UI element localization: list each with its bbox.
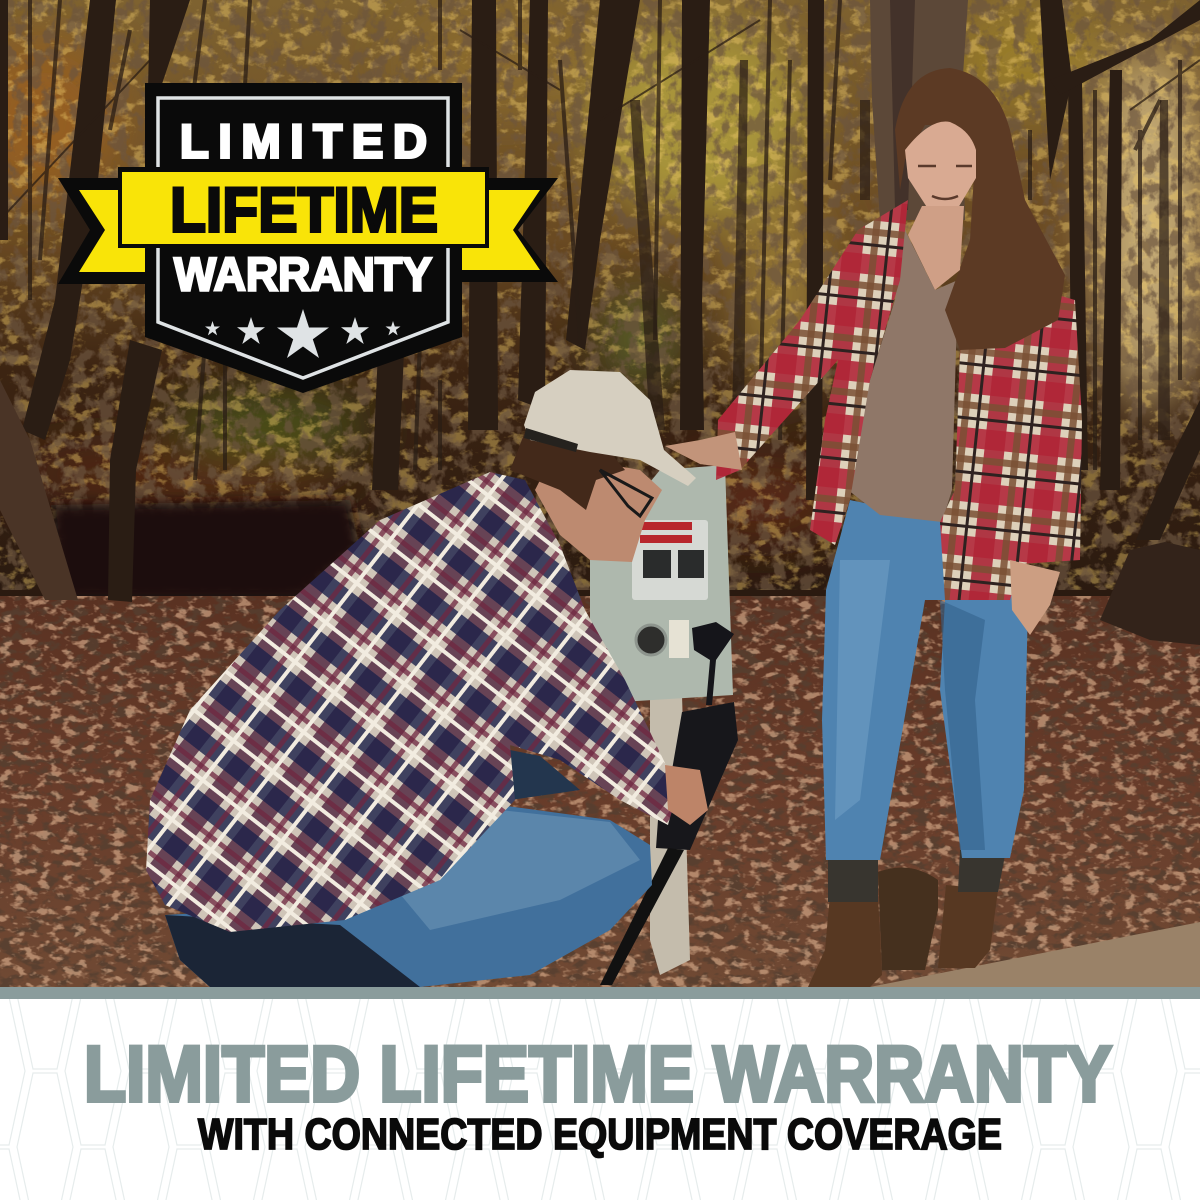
forest floor	[0, 596, 1200, 990]
socks	[828, 855, 878, 902]
neck and chest	[908, 206, 964, 290]
face	[905, 122, 976, 212]
person: crouching man	[146, 370, 708, 987]
manhole cap	[878, 868, 938, 970]
footer divider band	[0, 987, 1200, 999]
hand on plug	[665, 765, 708, 825]
thin background trunks and branches	[0, 0, 1200, 480]
warning label and breakers	[632, 520, 708, 600]
boots	[808, 895, 882, 987]
jeans	[822, 500, 1028, 860]
dark hollow behind the man	[50, 500, 360, 600]
pedestal cabinet	[590, 465, 733, 702]
electrical pedestal	[590, 465, 738, 985]
tree stump	[1100, 542, 1200, 645]
warranty badge	[58, 83, 558, 393]
flannel jacket left panel	[716, 200, 908, 545]
face and neck	[535, 455, 662, 562]
glasses	[600, 470, 652, 516]
subheading: WITH CONNECTED EQUIPMENT COVERAGE	[198, 1110, 1002, 1159]
flannel jacket right panel	[940, 290, 1082, 600]
tree trunks	[0, 0, 1200, 602]
center ribbon banner	[118, 167, 489, 248]
footer panel	[0, 987, 1200, 1200]
shield	[145, 83, 462, 393]
log in foreground	[870, 922, 1200, 987]
shaded gap under the arm	[510, 750, 580, 800]
ribbon tails	[58, 178, 558, 284]
support post	[650, 695, 690, 975]
jeans	[165, 805, 652, 987]
cuff and hand	[665, 432, 742, 470]
person: standing woman	[665, 68, 1082, 987]
facial features	[918, 166, 972, 199]
outlet	[636, 625, 666, 655]
text: LIMITED: LIMITED	[180, 114, 427, 168]
text: LIFETIME: LIFETIME	[170, 176, 438, 246]
plaid shirt	[146, 472, 678, 932]
text: WARRANTY: WARRANTY	[174, 248, 432, 300]
taupe top	[848, 230, 958, 522]
hair	[510, 432, 625, 510]
large trunk behind the woman	[870, 0, 968, 220]
long hair	[895, 68, 1065, 350]
power plug and cord	[692, 622, 734, 705]
baseball cap	[524, 370, 696, 486]
stars	[205, 309, 400, 358]
